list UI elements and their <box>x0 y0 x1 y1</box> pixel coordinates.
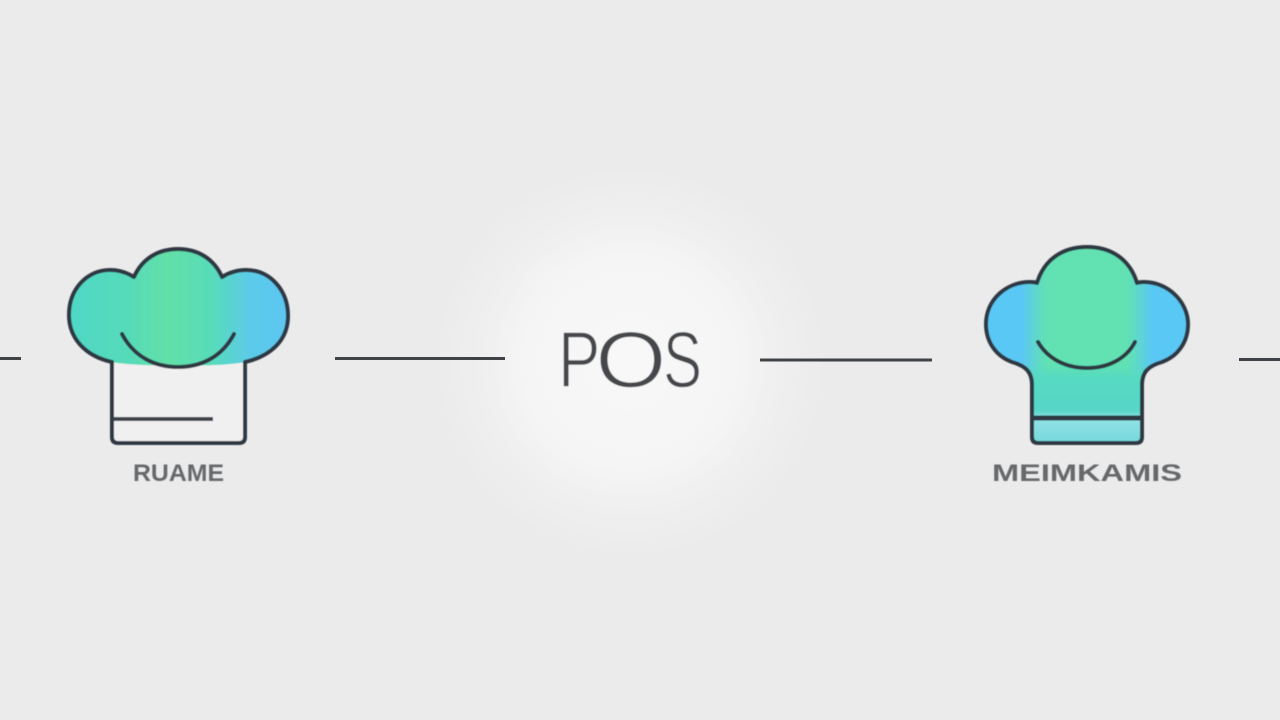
title: POS: O <box>595 315 666 404</box>
label: right hat: MEIMKAMIS <box>992 460 1182 487</box>
icon: left chef hat <box>69 249 288 443</box>
connector line: far left <box>0 357 21 360</box>
label: left hat: RUAME <box>133 460 224 487</box>
title: POS <box>558 315 702 404</box>
connector line: POS to right hat <box>760 358 932 362</box>
title: POS: S <box>663 315 702 404</box>
central glow <box>435 167 825 557</box>
connector line: far right <box>1239 358 1280 361</box>
icon: right chef hat <box>980 240 1195 450</box>
connector line: left hat to POS <box>335 357 505 360</box>
title: POS: P <box>558 315 600 404</box>
